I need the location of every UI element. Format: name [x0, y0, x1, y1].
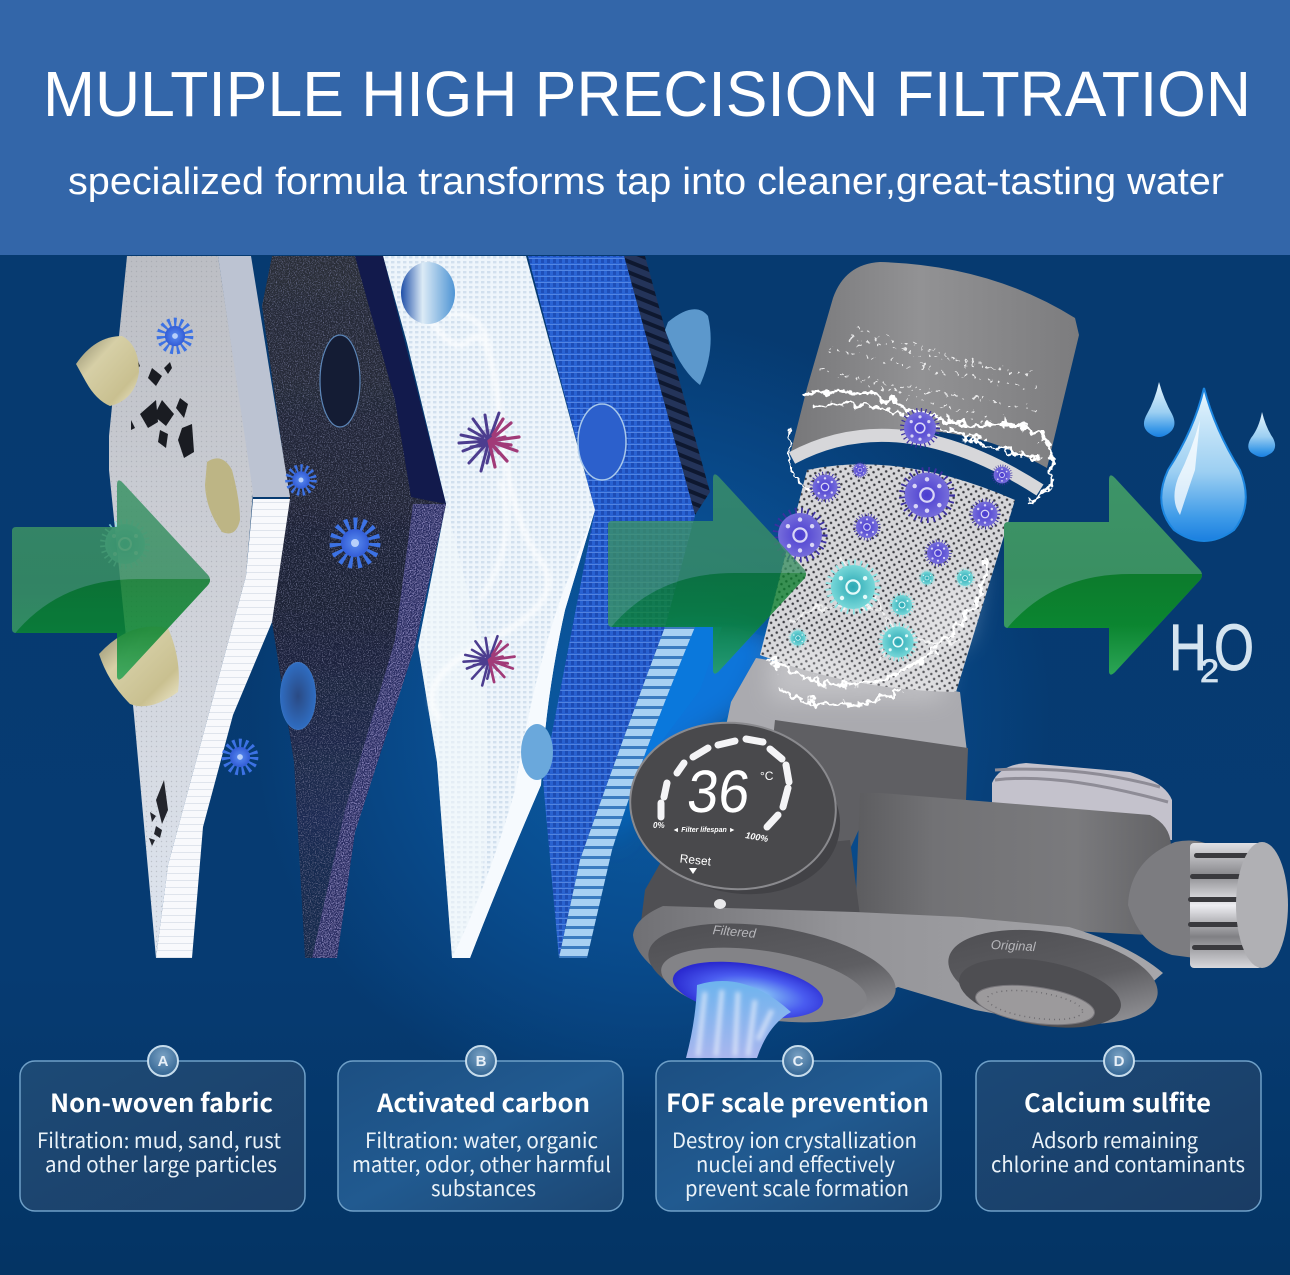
filter layer 3: white mesh	[383, 256, 595, 958]
heading: Non-woven fabric	[50, 1084, 273, 1120]
icon: droplet near blue mesh	[578, 404, 626, 480]
subtitle: specialized formula transforms tap into cleaner,great-tasting water	[68, 161, 1224, 203]
perforated filter core	[760, 464, 1015, 692]
icon: blue virus large on carbon	[336, 524, 374, 562]
description	[991, 1125, 1245, 1179]
lower plate	[633, 906, 1163, 1023]
icon: microbe burst lower	[464, 636, 514, 686]
arrow: through filter stack	[608, 474, 814, 689]
title: MULTIPLE HIGH PRECISION FILTRATION	[43, 58, 1251, 130]
header band	[0, 0, 1290, 255]
badge C: C	[793, 1053, 804, 1070]
cartridge cap	[790, 262, 1079, 468]
neck behind display	[760, 720, 968, 860]
icon: rock droplet middle	[205, 458, 240, 534]
icon: droplet on comb	[665, 309, 711, 385]
clean water drops	[1144, 382, 1275, 541]
icon: dirt particles lower	[149, 780, 168, 846]
icon: large water drop	[1161, 388, 1246, 541]
badge B	[466, 1046, 496, 1076]
H2O label: 2	[1200, 653, 1219, 689]
badge A: A	[158, 1053, 169, 1070]
H2O label: O	[1214, 610, 1254, 684]
description	[352, 1125, 611, 1203]
icon: blue virus on carbon	[289, 468, 313, 492]
temperature reading: 36	[684, 758, 753, 825]
water droplets and contaminants on filters	[76, 262, 711, 780]
gauge min label: 0%	[653, 821, 665, 830]
cartridge flange	[722, 658, 967, 752]
degree unit: °C	[760, 769, 774, 783]
threaded connector	[992, 763, 1172, 840]
description: prevent scale formation	[685, 1173, 909, 1203]
filter lifespan label: ◄ Filter lifespan ►	[672, 827, 736, 834]
icon: dark droplet on carbon	[320, 335, 360, 427]
H2O label	[1169, 610, 1254, 689]
icon: rock droplet lower	[99, 626, 179, 706]
icon: blue virus top	[161, 322, 189, 350]
indicator dot	[714, 899, 726, 909]
icon: droplet lower mesh	[521, 724, 553, 780]
icon: droplet top of mesh	[401, 262, 455, 324]
filter layer 1: non-woven fabric	[109, 256, 290, 958]
description	[37, 1125, 281, 1179]
card A: non-woven fabric	[20, 1046, 305, 1211]
description: and other large particles	[45, 1149, 277, 1179]
icon: blue LED glow	[669, 952, 827, 1028]
icon: small water drop right	[1248, 412, 1275, 457]
badge D	[1104, 1046, 1134, 1076]
heading: FOF scale prevention	[666, 1084, 929, 1120]
badge D: D	[1114, 1053, 1125, 1070]
cartridge ring	[792, 435, 1040, 490]
badge C	[783, 1046, 813, 1076]
label: Filtered: Filtered	[712, 922, 757, 941]
base collar under display	[640, 840, 860, 930]
knob collar	[1128, 841, 1210, 960]
water mist on core	[770, 560, 985, 700]
card C: FOF scale prevention	[656, 1046, 941, 1211]
arrow: into filter stack	[12, 480, 218, 695]
icon: dirt particles upper	[130, 356, 194, 458]
description: Adsorb remaining	[1032, 1125, 1198, 1155]
description: Destroy ion crystallization	[672, 1125, 917, 1155]
water stream	[686, 981, 791, 1058]
digital display	[621, 713, 855, 913]
drop highlight	[1174, 420, 1200, 515]
filter layer 2: activated carbon	[262, 256, 446, 958]
water splash	[770, 330, 1052, 705]
icon: droplet on carbon lower	[280, 662, 316, 730]
description	[672, 1125, 917, 1203]
label: Original: Original	[990, 937, 1037, 954]
arrow: to clean water	[1004, 475, 1210, 690]
main housing	[855, 793, 1171, 935]
heading: Calcium sulfite	[1024, 1084, 1211, 1120]
badge B: B	[476, 1053, 487, 1070]
filter cartridge	[722, 262, 1079, 752]
icon: microbe burst upper	[459, 413, 519, 471]
chrome knob	[1188, 842, 1288, 968]
description: matter, odor, other harmful	[352, 1149, 611, 1179]
icon: rock droplet top	[76, 336, 139, 406]
viruses on cartridge	[776, 410, 1011, 659]
icon: teal virus on first filter	[103, 522, 147, 566]
description: substances	[431, 1173, 536, 1203]
card B: activated carbon	[338, 1046, 623, 1211]
description: Filtration: mud, sand, rust	[37, 1125, 281, 1155]
H2O label: H	[1169, 610, 1207, 684]
reset pointer	[689, 868, 697, 874]
filtered nozzle	[641, 908, 903, 1036]
icon: blue virus behind first filter	[226, 743, 254, 771]
reset label: Reset	[679, 851, 712, 869]
faucet device	[621, 713, 1288, 1058]
badge A	[148, 1046, 178, 1076]
icon: small water drop left	[1144, 382, 1174, 437]
lifespan gauge segments	[661, 739, 789, 827]
heading: Activated carbon	[376, 1084, 590, 1120]
description: chlorine and contaminants	[991, 1149, 1245, 1179]
background	[0, 255, 1290, 1275]
description: Filtration: water, organic	[365, 1125, 598, 1155]
filter layer 4: blue mesh	[528, 256, 775, 958]
card D: calcium sulfite	[976, 1046, 1261, 1211]
description: nuclei and effectively	[696, 1149, 895, 1179]
original nozzle	[941, 915, 1165, 1039]
gauge max label: 100%	[745, 830, 769, 844]
